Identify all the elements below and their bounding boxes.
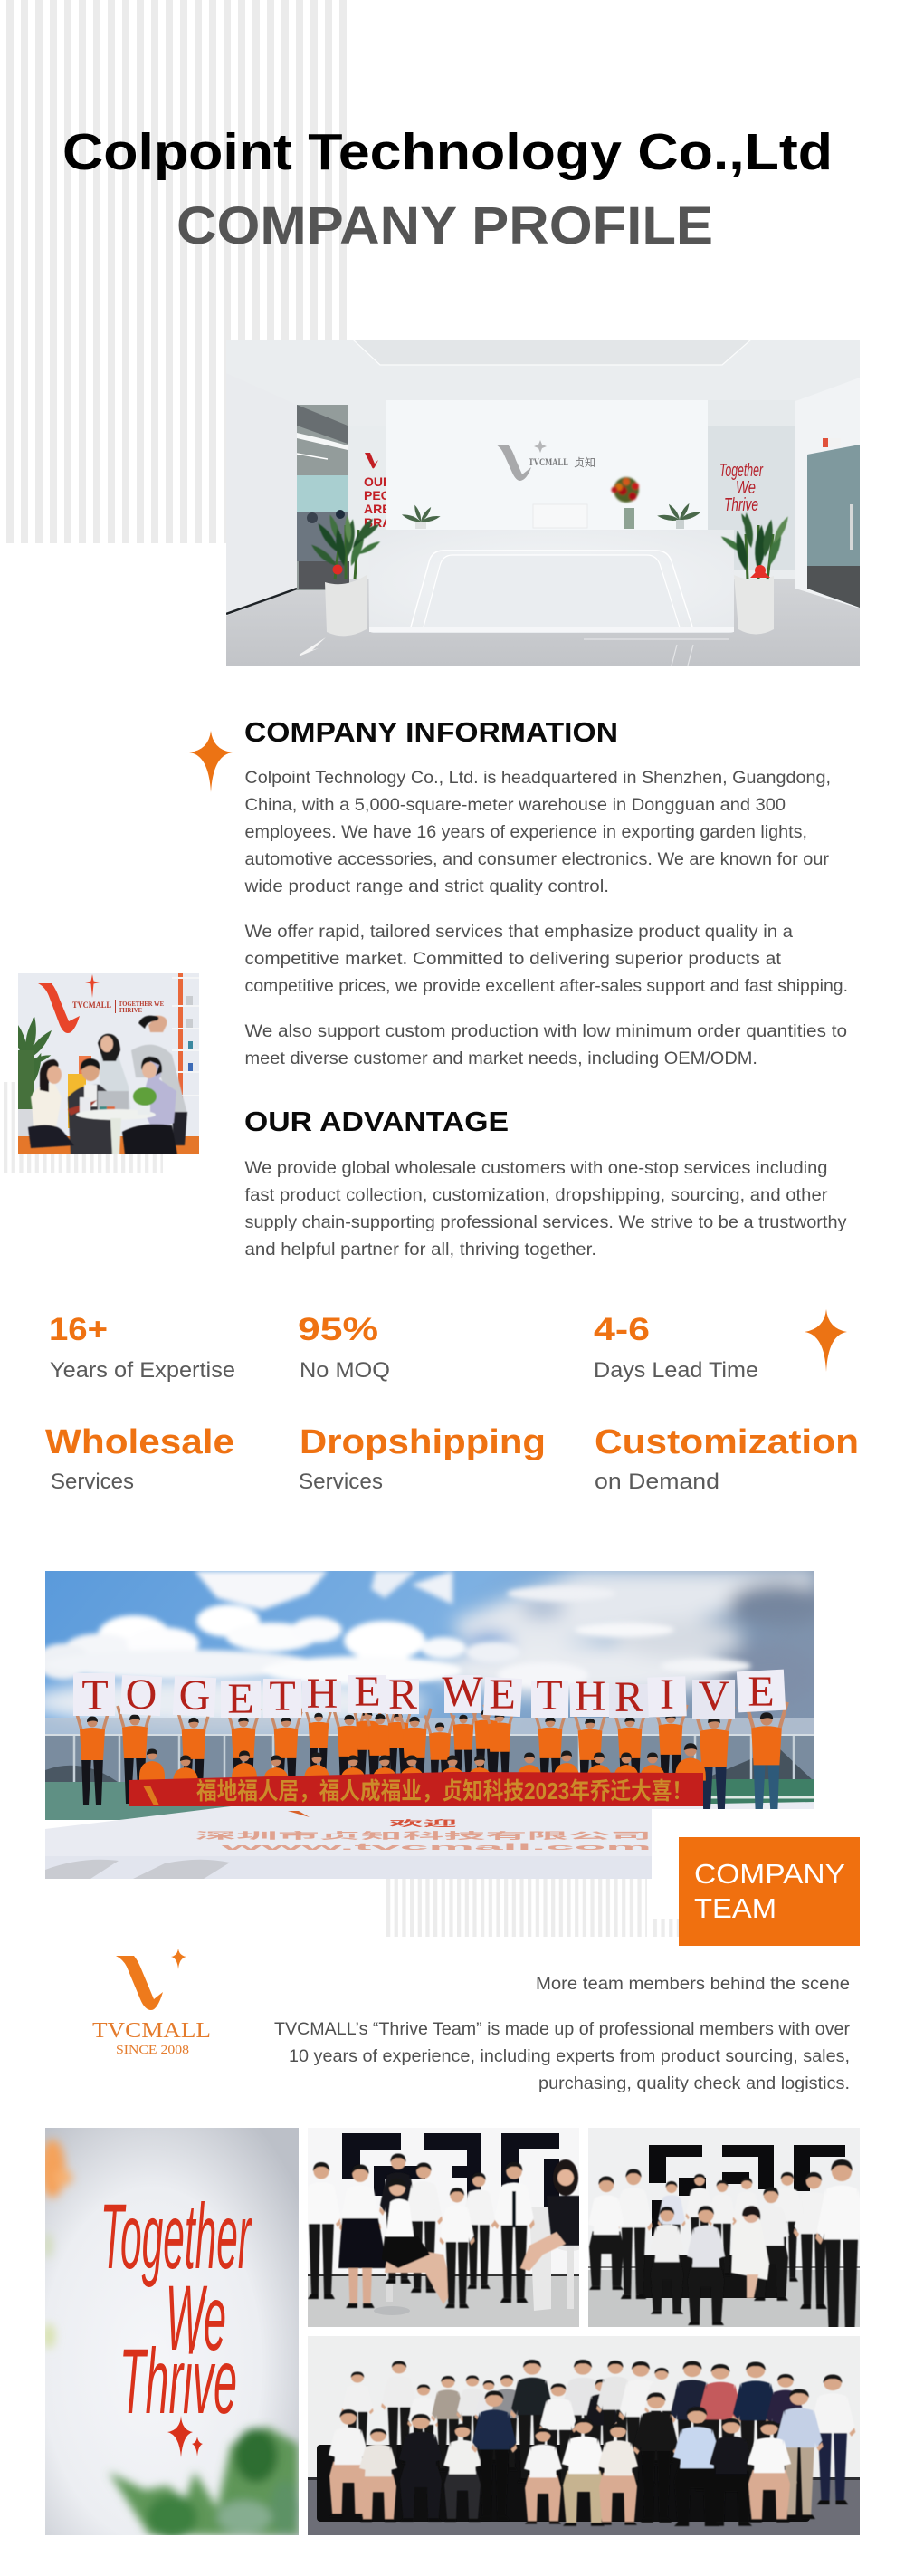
sub: black sofa	[639, 2255, 786, 2298]
title: Colpoint Technology Co.,Ltd	[62, 123, 833, 181]
sub: reception desk	[368, 530, 734, 633]
photo: together we thrive wall: Together	[100, 2185, 252, 2288]
sub: monitor, flowers and small plants	[401, 477, 702, 529]
stat: no MOQ: 95%	[298, 1312, 378, 1347]
text block: company information paragraph 1: Colpoint Technology Co., Ltd. is headquartered in Shenzhen, Guangdong,	[244, 768, 831, 788]
sub: black sofa	[317, 2445, 810, 2522]
callout: company team: COMPANY	[694, 1858, 845, 1890]
text block: company information paragraph 1: China, with a 5,000-square-meter warehouse in Dongguan and 300	[244, 795, 786, 815]
stat: wholesale services: Wholesale	[45, 1423, 234, 1461]
stat: dropshipping services	[299, 1423, 546, 1494]
photo: office reception: ARE	[364, 502, 391, 516]
sub: script lettering: Thrive	[119, 2330, 237, 2433]
sub: back row	[341, 2360, 855, 2519]
stat: no MOQ: No MOQ	[300, 1358, 390, 1383]
logo: TVCMALL since 2008: SINCE 2008	[116, 2044, 189, 2057]
sub: placards: H	[575, 1672, 605, 1720]
text block: our advantage	[244, 1158, 847, 1259]
text block: company information paragraph 1: wide product range and strict quality control.	[243, 876, 609, 896]
photo: staff around table	[7, 973, 199, 1154]
sub: floor lettering: www.tvcmall.com	[216, 1843, 652, 1852]
sub: script on wall: Thrive	[724, 495, 758, 515]
stat: dropshipping services: Dropshipping	[300, 1423, 546, 1461]
sub: right column and door	[795, 579, 860, 608]
text block: company information paragraph 3: We also support custom production with low minimum order quantities to	[244, 1021, 847, 1041]
sub: brand wall mark	[38, 974, 164, 1033]
stat: customization on demand: on Demand	[595, 1470, 719, 1494]
text block: company information paragraph 2	[244, 922, 848, 996]
photo: team group standing	[301, 2128, 586, 2327]
sub: centre wall	[386, 400, 708, 531]
text block: company information paragraph 2: competitive market. Committed to delivering superior products at	[244, 949, 782, 969]
sub: clouds	[27, 1571, 828, 1729]
sub: red banner	[129, 1772, 703, 1806]
text block: our advantage: and helpful partner for all, thriving together.	[244, 1240, 596, 1259]
sub: placards: H	[307, 1670, 338, 1718]
sub: plant	[18, 1017, 52, 1136]
stat: dropshipping services: Services	[299, 1470, 383, 1494]
photo: office reception	[226, 340, 860, 666]
sub: black wall pattern	[649, 2145, 845, 2236]
text block: company information paragraph 1: automotive accessories, and consumer electronics. We are known for our	[244, 849, 830, 869]
text block: thrive team: purchasing, quality check and logistics.	[538, 2073, 850, 2093]
text block: company information paragraph 1: employees. We have 16 years of experience in exporting garden lights,	[244, 822, 807, 842]
text block: our advantage: fast product collection, customization, dropshipping, sourcing, and other	[244, 1185, 828, 1205]
sub: placards: I	[660, 1671, 674, 1719]
sub: placards: E	[489, 1671, 516, 1719]
stat: days lead time: 4-6	[594, 1312, 650, 1347]
logo: TVCMALL since 2008: TVCMALL	[92, 2019, 211, 2043]
stat: years of expertise	[49, 1312, 235, 1383]
stat: customization on demand	[595, 1423, 859, 1494]
sub: brand wall mark: THRIVE	[119, 1006, 142, 1014]
photo: office reception: PEO	[364, 488, 391, 503]
sub: placards: G	[179, 1671, 210, 1719]
callout: company team	[679, 1837, 860, 1946]
sub: pillar and stool	[374, 2207, 586, 2315]
photo: office reception: OUR	[364, 474, 392, 489]
sub: grey logo on wall: TVCMALL	[529, 455, 568, 468]
subtitle: COMPANY PROFILE	[176, 196, 713, 255]
stat: no MOQ	[298, 1312, 390, 1383]
sub: script on wall: We	[736, 478, 756, 498]
sub: placards: R	[388, 1671, 417, 1719]
sub: grey logo on wall: 贞知	[574, 456, 595, 469]
sub: floor lettering: 深圳市贞知科技有限公司	[195, 1830, 652, 1842]
sub: placards: V	[699, 1672, 730, 1720]
sub: blurred flower and foliage	[40, 2140, 300, 2539]
icon: orange star right	[805, 1309, 847, 1372]
sub: right wall	[708, 426, 795, 570]
heading: company information: COMPANY INFORMATION	[244, 716, 618, 748]
photo: office reception: BRA	[364, 515, 391, 530]
sub: red banner: 福地福人居，福人成福业，贞知科技2023年乔迁大喜！	[196, 1777, 692, 1805]
photo: full team group on sofa	[308, 2336, 860, 2535]
sub: left potted plant	[310, 513, 382, 636]
photo: team rooftop	[27, 1571, 828, 1879]
sub: placards: T	[269, 1672, 296, 1720]
text block: company information paragraph 2: We offer rapid, tailored services that emphasize product quality in a	[244, 922, 793, 942]
sub: people standing under placards	[75, 1702, 787, 1819]
sub: placards: E	[354, 1668, 381, 1716]
text block: thrive team: 10 years of experience, including experts from product sourcing, sales,	[289, 2046, 850, 2066]
text block: our advantage: supply chain-supporting professional services. We strive to be a trustworthy	[244, 1212, 847, 1232]
callout: company team: TEAM	[694, 1892, 776, 1924]
sub: floor lettering: 欢迎	[389, 1818, 457, 1828]
sub: floor lettering	[45, 1811, 652, 1879]
text block: company information paragraph 3: meet diverse customer and market needs, including OEM/ODM.	[244, 1049, 757, 1068]
text block: thrive team	[274, 2019, 851, 2093]
sub: placards: R	[614, 1673, 643, 1721]
text block: our advantage: We provide global wholesale customers with one-stop services including	[244, 1158, 827, 1178]
sub: placards: W	[442, 1668, 483, 1716]
sub: people	[28, 1016, 187, 1154]
sub: placards: O	[126, 1671, 157, 1719]
decorative stripes behind small photo	[4, 1082, 163, 1173]
sub: people	[588, 2159, 868, 2337]
text block: thrive team: TVCMALL’s “Thrive Team” is made up of professional members with over	[274, 2019, 851, 2039]
photo: together we thrive wall	[40, 2128, 300, 2539]
sub: grey logo on wall	[496, 440, 595, 481]
stat: wholesale services	[45, 1423, 234, 1494]
sub: left wall	[226, 579, 297, 616]
sub: script lettering: We	[166, 2266, 226, 2370]
sub: orange seat	[18, 1136, 199, 1154]
sub: brand wall mark: TOGETHER WE	[119, 1000, 164, 1008]
sub: glass opening	[297, 405, 349, 590]
stat: days lead time	[594, 1312, 758, 1383]
text block: company information paragraph 3	[244, 1021, 847, 1068]
text block: company information paragraph 1	[243, 768, 831, 896]
sub: script lettering	[100, 2185, 252, 2433]
sub: yellow and coral panels	[79, 1056, 91, 1076]
stat: wholesale services: Services	[51, 1470, 134, 1494]
sub: front row	[329, 2390, 791, 2526]
sub: people	[301, 2153, 581, 2308]
text block: company information paragraph 2: competitive prices, we provide excellent after-sales support and fast shipping.	[244, 976, 848, 996]
sub: wall behind left	[348, 426, 387, 539]
decorative stripes under team photo	[386, 1879, 647, 1937]
heading: our advantage: OUR ADVANTAGE	[244, 1106, 509, 1137]
sub: placards: T	[81, 1671, 109, 1719]
stat: years of expertise: Years of Expertise	[50, 1358, 235, 1383]
sub: placards: E	[748, 1668, 775, 1716]
text: more team members: More team members behind the scene	[536, 1974, 850, 1994]
icon: orange star	[189, 731, 233, 792]
sub: placards: T	[536, 1671, 563, 1719]
stat: customization on demand: Customization	[595, 1423, 859, 1461]
sub: black wall pattern	[342, 2133, 559, 2209]
sub: shelf	[172, 973, 199, 1109]
sub: script on wall	[720, 463, 764, 511]
sub: brand wall mark: TVCMALL	[72, 1001, 111, 1010]
sub: right potted plant	[719, 512, 791, 634]
logo: TVCMALL since 2008	[92, 1949, 211, 2057]
sub: red stars	[167, 2416, 203, 2457]
stat: years of expertise: 16+	[49, 1312, 108, 1347]
sub: fence and ground	[45, 1735, 814, 1879]
stat: days lead time: Days Lead Time	[594, 1358, 758, 1383]
sub: placards	[73, 1670, 786, 1719]
photo: team group with sofa	[588, 2128, 868, 2337]
sub: script on wall: Together	[719, 461, 764, 481]
sub: placards: E	[227, 1675, 254, 1723]
decorative stripes top	[6, 0, 347, 543]
